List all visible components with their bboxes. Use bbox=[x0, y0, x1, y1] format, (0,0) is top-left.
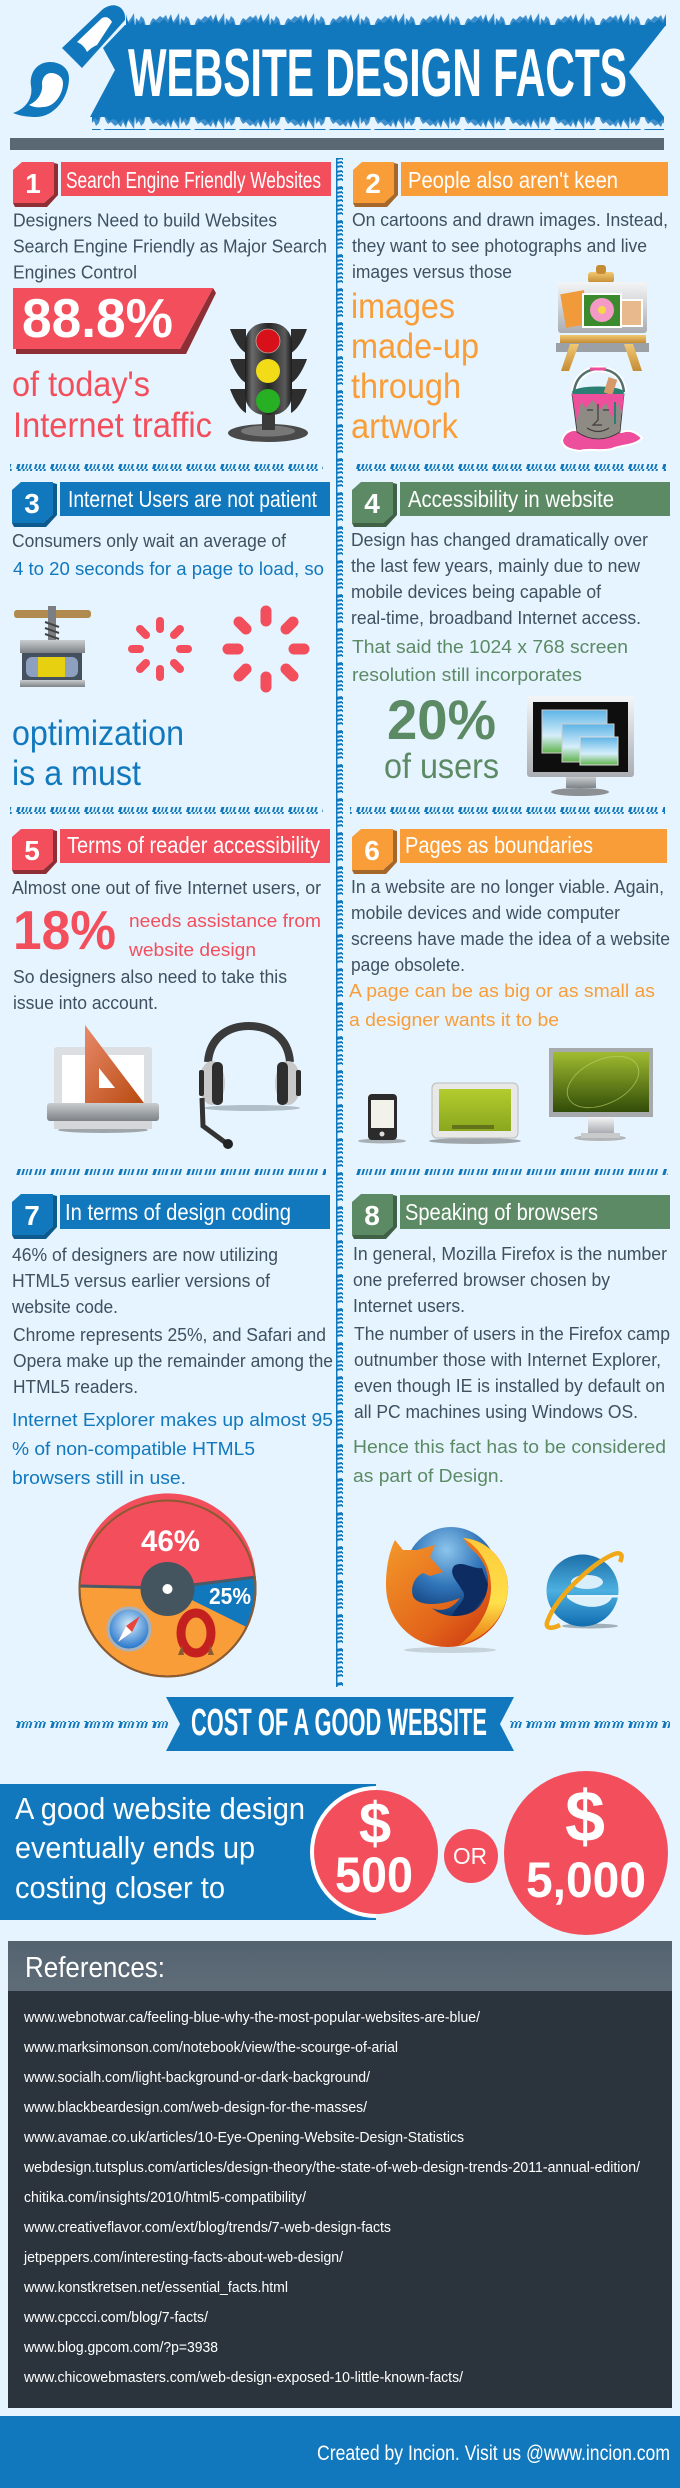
stat 18%: needs assistance from bbox=[129, 910, 321, 931]
divider bbox=[353, 1169, 668, 1175]
circle: $500: 500 bbox=[335, 1847, 413, 1903]
body text 2: images versus those bbox=[352, 262, 512, 282]
reference list bbox=[23, 2010, 641, 2386]
callout text: eventually ends up bbox=[15, 1830, 255, 1865]
optimization text bbox=[12, 714, 184, 793]
stat caption bbox=[12, 365, 212, 445]
number badge 7: 7 bbox=[24, 1200, 40, 1231]
panel 1: search engine friendly websites bbox=[10, 162, 331, 471]
icon: opera bbox=[178, 1613, 214, 1655]
circle: $500 bbox=[314, 1790, 438, 1914]
heading bar 1: Search Engine Friendly Websites bbox=[66, 167, 321, 193]
pie chart: 25% bbox=[209, 1583, 251, 1609]
number badge 1 bbox=[13, 162, 58, 207]
body text 7: 46% of designers are now utilizing bbox=[12, 1245, 278, 1265]
body text 6: mobile devices and wide computer bbox=[351, 903, 620, 923]
stat 18%: website design bbox=[128, 939, 256, 960]
icon: monitor with windows bbox=[527, 696, 634, 796]
highlighted text 7 bbox=[12, 1409, 333, 1488]
body text 2 bbox=[352, 210, 668, 282]
reference list: www.creativeflavor.com/ext/blog/trends/7-web-design-facts bbox=[23, 2220, 391, 2236]
reference list: www.chicowebmasters.com/web-design-exposed-10-little-known-facts/ bbox=[23, 2370, 464, 2386]
circle: $5,000 bbox=[504, 1771, 668, 1935]
highlighted text 4 bbox=[352, 636, 628, 685]
heading bar 5: Terms of reader accessibility bbox=[67, 832, 320, 858]
closing text 5: So designers also need to take this bbox=[13, 967, 287, 987]
body text 8 bbox=[353, 1244, 670, 1422]
heading bar 8 bbox=[400, 1195, 670, 1229]
icon: desktop monitor bbox=[549, 1046, 653, 1141]
closing text 5 bbox=[13, 967, 287, 1013]
panel 4: accessibility in website bbox=[350, 482, 670, 814]
body text 8: In general, Mozilla Firefox is the number bbox=[353, 1244, 667, 1264]
highlighted text 8 bbox=[353, 1436, 666, 1486]
heading bar 3: Internet Users are not patient bbox=[68, 486, 318, 512]
icon: laptop with set square bbox=[47, 1025, 159, 1133]
number badge 5 bbox=[12, 829, 57, 874]
highlighted text 7: browsers still in use. bbox=[12, 1467, 186, 1488]
highlighted text 6: a designer wants it to be bbox=[349, 1009, 559, 1030]
divider bbox=[352, 464, 666, 471]
heading bar 4 bbox=[400, 482, 670, 516]
body text 4 bbox=[351, 530, 648, 628]
number badge 2: 2 bbox=[365, 168, 381, 199]
divider bbox=[10, 807, 323, 814]
body text 1: Designers Need to build Websites bbox=[13, 210, 277, 230]
highlighted words bbox=[351, 287, 479, 446]
circle: $5,000: 5,000 bbox=[526, 1852, 646, 1908]
panel 8: speaking of browsers bbox=[352, 1194, 670, 1653]
body text 7: HTML5 versus earlier versions of bbox=[12, 1271, 271, 1291]
highlighted text 7: Internet Explorer makes up almost 95 bbox=[12, 1409, 333, 1430]
highlighted text 6 bbox=[349, 980, 655, 1030]
highlighted text 7: % of non-compatible HTML5 bbox=[12, 1438, 255, 1459]
number badge 5: 5 bbox=[24, 835, 40, 866]
heading bar 2: People also aren't keen bbox=[408, 167, 618, 193]
circle: or: OR bbox=[453, 1843, 487, 1869]
heading bar 8: Speaking of browsers bbox=[405, 1199, 598, 1225]
callout text bbox=[15, 1791, 305, 1905]
vertical divider bbox=[336, 158, 343, 1687]
body text 5: Almost one out of five Internet users, or bbox=[12, 878, 321, 898]
number badge 7 bbox=[12, 1194, 57, 1239]
icon: easel with photos bbox=[556, 265, 649, 371]
icon: large loading spinner bbox=[228, 611, 304, 687]
stat 18% bbox=[13, 899, 321, 961]
body text 3: 4 to 20 seconds for a page to load, so bbox=[13, 558, 324, 579]
stat tag 88.8%: 88.8% bbox=[22, 287, 173, 349]
body text 1: Engines Control bbox=[13, 262, 137, 282]
panel 7: in terms of design coding bbox=[11, 1194, 333, 1676]
body text 6: In a website are no longer viable. Again, bbox=[351, 877, 664, 897]
pie chart: 46% bbox=[141, 1525, 200, 1558]
heading bar 1 bbox=[61, 162, 331, 196]
number badge 3 bbox=[12, 482, 57, 527]
icon: firefox bbox=[386, 1527, 508, 1653]
panel 6: pages as boundaries bbox=[349, 829, 670, 1175]
optimization text: is a must bbox=[12, 754, 141, 793]
closing text 5: issue into account. bbox=[13, 993, 158, 1013]
icon: safari bbox=[108, 1608, 150, 1650]
heading bar 7: In terms of design coding bbox=[65, 1199, 291, 1225]
highlighted text 4: That said the 1024 x 768 screen bbox=[352, 636, 628, 657]
divider bbox=[350, 807, 665, 814]
body text 8: one preferred browser chosen by bbox=[353, 1270, 610, 1290]
body text 4: mobile devices being capable of bbox=[351, 582, 602, 602]
panel 2: people also aren't keen bbox=[351, 162, 668, 471]
highlighted text 8: Hence this fact has to be considered bbox=[353, 1436, 666, 1457]
callout text: costing closer to bbox=[15, 1870, 225, 1905]
body text 8: outnumber those with Internet Explorer, bbox=[354, 1350, 661, 1370]
stat 18%: 18% bbox=[13, 899, 116, 961]
highlighted text 4: resolution still incorporates bbox=[352, 664, 582, 685]
optimization text: optimization bbox=[12, 714, 184, 753]
reference list: www.webnotwar.ca/feeling-blue-why-the-most-popular-websites-are-blue/ bbox=[23, 2010, 481, 2026]
icon: paint bucket bbox=[562, 369, 642, 451]
body text 7 bbox=[11, 1245, 333, 1397]
highlighted text 8: as part of Design. bbox=[353, 1465, 504, 1486]
references panel bbox=[8, 1941, 672, 2408]
highlighted words: made-up bbox=[351, 327, 479, 366]
highlighted words: images bbox=[351, 287, 455, 326]
body text 6 bbox=[351, 877, 670, 975]
divider bbox=[13, 1169, 326, 1175]
body text 6: page obsolete. bbox=[351, 955, 465, 975]
heading bar 6: Pages as boundaries bbox=[405, 832, 593, 858]
reference list: jetpeppers.com/interesting-facts-about-web-design/ bbox=[23, 2250, 344, 2266]
reference list: www.socialh.com/light-background-or-dark-background/ bbox=[23, 2070, 371, 2086]
number badge 2 bbox=[353, 162, 398, 207]
heading bar 4: Accessibility in website bbox=[408, 486, 614, 512]
icon: phone bbox=[358, 1094, 406, 1144]
footer bbox=[0, 2416, 680, 2488]
body text 6: screens have made the idea of a website bbox=[351, 929, 670, 949]
cost callout bbox=[0, 1771, 668, 1935]
body text 3: Consumers only wait an average of bbox=[12, 531, 287, 551]
panel 3: internet users are not patient bbox=[10, 482, 330, 814]
stat caption: Internet traffic bbox=[13, 406, 212, 445]
body text 2: On cartoons and drawn images. Instead, bbox=[352, 210, 668, 230]
circle: $500: $ bbox=[359, 1791, 391, 1856]
number badge 4: 4 bbox=[364, 488, 380, 519]
stat 20% of users bbox=[384, 688, 499, 786]
body text 8: even though IE is installed by default on bbox=[354, 1376, 665, 1396]
number badge 6 bbox=[352, 829, 397, 874]
number badge 8 bbox=[352, 1194, 397, 1239]
icon: headset bbox=[199, 1026, 301, 1149]
body text 2: they want to see photographs and live bbox=[352, 236, 647, 256]
body text 1: Search Engine Friendly as Major Search bbox=[13, 236, 327, 256]
body text 3 bbox=[12, 531, 324, 579]
icon: traffic light bbox=[228, 323, 308, 442]
references heading: References: bbox=[25, 1952, 165, 1984]
icon: tablet bbox=[429, 1083, 521, 1144]
body text 4: real-time, broadband Internet access. bbox=[351, 608, 641, 628]
icon: internet explorer bbox=[546, 1553, 622, 1628]
reference list: www.blackbeardesign.com/web-design-for-the-masses/ bbox=[23, 2100, 368, 2116]
body text 8: Internet users. bbox=[353, 1296, 465, 1316]
body text 1 bbox=[13, 210, 327, 282]
body text 8: The number of users in the Firefox camp bbox=[354, 1324, 670, 1344]
highlighted words: artwork bbox=[351, 407, 458, 446]
reference list: www.marksimonson.com/notebook/view/the-scourge-of-arial bbox=[23, 2040, 398, 2056]
body text 8: all PC machines using Windows OS. bbox=[354, 1402, 638, 1422]
divider bbox=[10, 464, 323, 471]
reference list: chitika.com/insights/2010/html5-compatibility/ bbox=[24, 2190, 307, 2206]
heading bar 5 bbox=[60, 829, 330, 863]
heading bar 3 bbox=[60, 482, 330, 516]
highlighted text 6: A page can be as big or as small as bbox=[349, 980, 655, 1001]
heading bar 6 bbox=[400, 829, 667, 863]
icon: small loading spinner bbox=[132, 621, 188, 677]
body text 7: Opera make up the remainder among the bbox=[13, 1351, 333, 1371]
reference list: webdesign.tutsplus.com/articles/design-theory/the-state-of-web-design-trends-2011-annual-edition/ bbox=[23, 2160, 641, 2176]
number badge 4 bbox=[352, 482, 397, 527]
number badge 3: 3 bbox=[24, 488, 40, 519]
callout text: A good website design bbox=[15, 1791, 305, 1826]
icon: paint brush bbox=[13, 5, 125, 117]
highlighted words: through bbox=[351, 367, 461, 406]
stat caption: of today's bbox=[12, 365, 150, 404]
reference list: www.cpccci.com/blog/7-facts/ bbox=[23, 2310, 209, 2326]
panel 5: terms of reader accessibility bbox=[12, 829, 330, 1175]
header rule bbox=[10, 138, 664, 150]
body text 7: website code. bbox=[11, 1297, 118, 1317]
body text 4: Design has changed dramatically over bbox=[351, 530, 648, 550]
circle: $5,000: $ bbox=[565, 1777, 605, 1857]
reference list: www.blog.gpcom.com/?p=3938 bbox=[23, 2340, 218, 2356]
body text 4: the last few years, mainly due to new bbox=[351, 556, 641, 576]
number badge 6: 6 bbox=[364, 835, 380, 866]
stat 20% of users: 20% bbox=[387, 688, 496, 751]
reference list: www.avamae.co.uk/articles/10-Eye-Opening-Website-Design-Statistics bbox=[23, 2130, 464, 2146]
body text 7: Chrome represents 25%, and Safari and bbox=[13, 1325, 326, 1345]
icon: compression press bbox=[14, 606, 91, 687]
body text 7: HTML5 readers. bbox=[13, 1377, 138, 1397]
number badge 8: 8 bbox=[364, 1200, 380, 1231]
title banner bbox=[90, 13, 666, 130]
number badge 1: 1 bbox=[25, 168, 41, 199]
section heading: cost of a good website bbox=[14, 1697, 670, 1751]
heading bar 2 bbox=[401, 162, 668, 196]
circle: or bbox=[444, 1829, 498, 1883]
reference list: www.konstkretsen.net/essential_facts.html bbox=[23, 2280, 288, 2296]
stat 20% of users: of users bbox=[384, 747, 499, 786]
pie chart bbox=[79, 1493, 256, 1676]
